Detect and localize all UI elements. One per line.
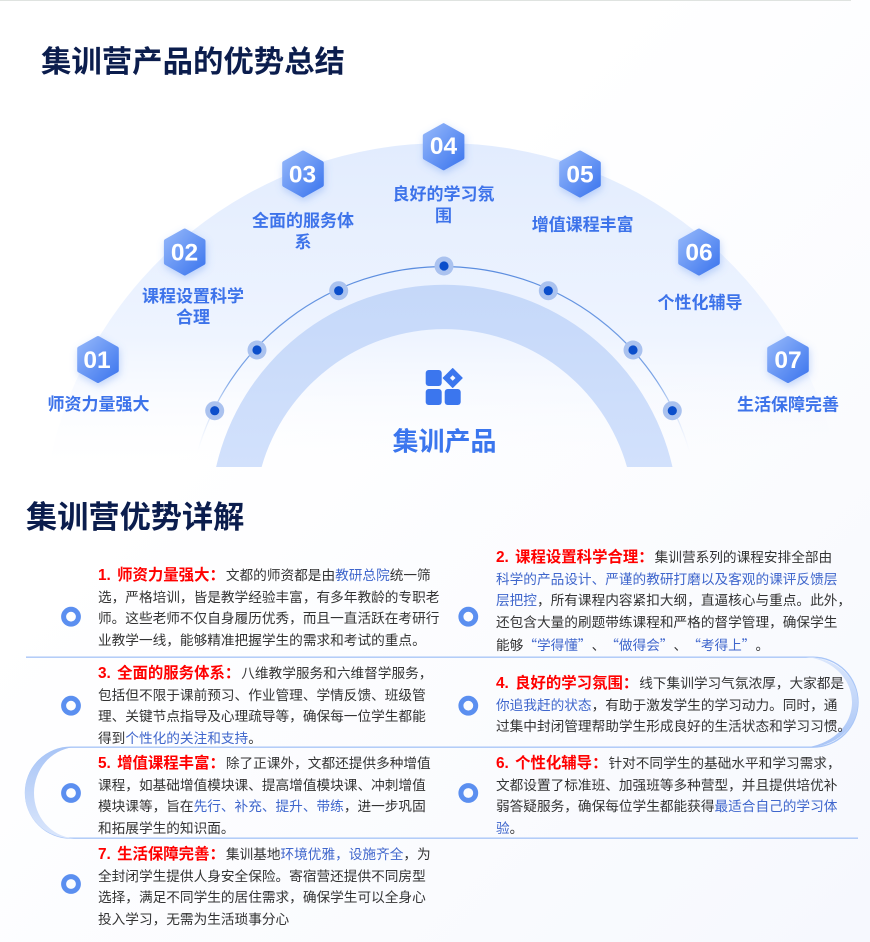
item 06 <box>658 230 742 312</box>
item 03: 系 <box>294 232 312 252</box>
icon: product blocks <box>426 368 462 405</box>
item 05: 增值课程丰富 <box>532 214 634 234</box>
text block 1: 业教学一线，能够精准把握学生的需求和考试的重点。 <box>98 633 426 648</box>
item 05 <box>532 152 634 234</box>
top rule <box>0 0 851 1</box>
S-shaped divider lines <box>25 657 858 838</box>
item 05: 05 <box>566 162 594 188</box>
item 04 <box>392 125 494 226</box>
text block 2: 科学的产品设计、严谨的教研打磨以及客观的课评反馈层 <box>496 572 837 587</box>
text block 7: 全封闭学生提供人身安全保险。寄宿营还提供不同房型 <box>98 869 426 884</box>
text block 7 <box>98 846 431 927</box>
text block 2: 能够“学得懂”、“做得会”、“考得上”。 <box>496 634 769 654</box>
text block 7: 选择，满足不同学生的居住需求，确保学生可以全身心 <box>98 890 426 905</box>
text block 3: 3. 全面的服务体系：八维教学服务和六维督学服务， <box>98 665 432 682</box>
item 04: 围 <box>435 206 452 226</box>
timeline dots <box>205 256 682 420</box>
text block 3: 包括但不限于课前预习、作业管理、学情反馈、班级管 <box>98 688 426 703</box>
text block 5: 课程，如基础增值模块课、提高增值模块课、冲刺增值 <box>98 778 426 793</box>
title: 集训营产品的优势总结 <box>41 45 345 79</box>
inner band arch <box>216 285 672 467</box>
text block 2: 2. 课程设置科学合理：集训营系列的课程安排全部由 <box>496 549 832 566</box>
center label: 集训产品 <box>392 426 497 456</box>
text block 6: 弱答疑服务，确保每位学生都能获得最适合自己的学习体 <box>496 799 837 814</box>
text block 7: 投入学习，无需为生活琐事分心 <box>98 912 289 927</box>
thin timeline arc <box>197 267 690 454</box>
item 07: 07 <box>774 347 802 374</box>
outer fan background <box>50 143 837 460</box>
item 06: 06 <box>685 240 713 266</box>
text block 2 <box>496 548 851 654</box>
text block 4: 过集中封闭管理帮助学生形成良好的生活状态和学习习惯。 <box>496 719 851 734</box>
item 03: 03 <box>289 162 316 188</box>
text block 6: 验。 <box>496 821 523 836</box>
text block 4 <box>496 674 851 734</box>
item 07: 生活保障完善 <box>737 394 839 414</box>
item 04: 良好的学习氛 <box>392 184 494 204</box>
item 01: 师资力量强大 <box>48 395 150 414</box>
text block 2: 还包含大量的刷题带练课程和严格的督学管理，确保学生 <box>496 615 837 630</box>
text block 6: 文都设置了标准班、加强班等多种营型，并且提供培优补 <box>496 778 837 793</box>
text block 5: 模块课等，旨在先行、补充、提升、带练，进一步巩固 <box>98 799 426 814</box>
text block 3: 理、关键节点指导及心理疏导等，确保每一位学生都能 <box>98 709 426 724</box>
text block 1: 师。这些老师不仅自身履历优秀，而且一直活跃在考研行 <box>98 611 439 626</box>
item 03: 全面的服务体 <box>252 210 354 230</box>
item 04: 04 <box>430 133 457 160</box>
item 06: 个性化辅导 <box>658 292 742 312</box>
item 07 <box>737 338 839 414</box>
section heading: 集训营优势详解 <box>26 500 244 535</box>
text block 5: 和拓展学生的知识面。 <box>98 821 235 836</box>
item 02: 合理 <box>176 307 210 327</box>
bullet rings <box>64 609 476 891</box>
item 03 <box>252 152 354 252</box>
text block 3 <box>98 664 432 746</box>
text block 4: 4. 良好的学习氛围：线下集训学习气氛浓厚，大家都是 <box>496 675 844 692</box>
text block 5 <box>98 754 431 836</box>
text block 3: 得到个性化的关注和支持。 <box>98 731 262 746</box>
text block 2: 层把控，所有课程内容紧扣大纲，直逼核心与重点。此外， <box>496 593 851 608</box>
item 01: 01 <box>83 347 111 374</box>
item 02 <box>142 230 244 327</box>
text block 5: 5. 增值课程丰富：除了正课外，文都还提供多种增值 <box>98 755 431 772</box>
text block 1: 1. 师资力量强大：文都的师资都是由教研总院统一筛 <box>98 567 431 584</box>
text block 6: 6. 个性化辅导：针对不同学生的基础水平和学习需求， <box>496 755 841 772</box>
text block 6 <box>496 754 841 836</box>
text block 4: 你追我赶的状态，有助于激发学生的学习动力。同时，通 <box>496 698 837 713</box>
text block 7: 7. 生活保障完善：集训基地环境优雅，设施齐全，为 <box>98 846 431 863</box>
text block 1: 选，严格培训，皆是教学经验丰富，有多年教龄的专职老 <box>98 590 439 605</box>
text block 1 <box>98 566 439 648</box>
item 02: 02 <box>171 240 198 266</box>
item 02: 课程设置科学 <box>142 286 244 306</box>
item 01 <box>48 338 150 414</box>
